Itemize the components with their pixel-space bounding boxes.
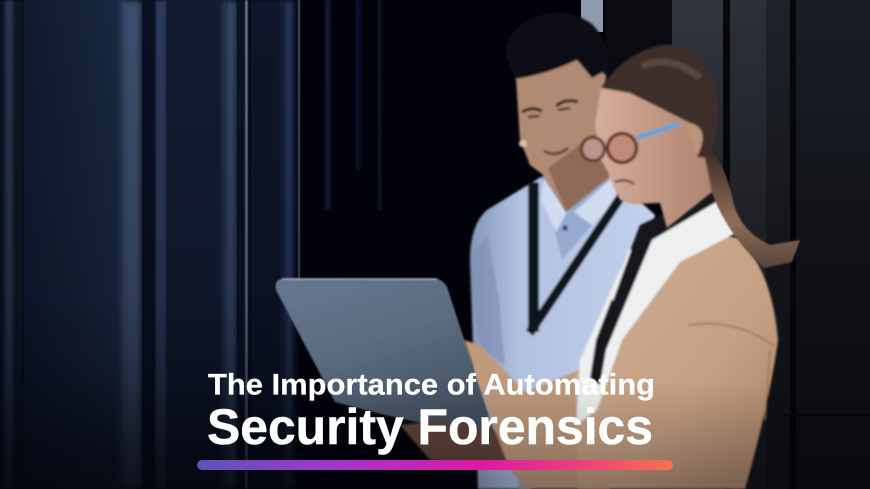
- background: server racks left: [0, 0, 382, 489]
- title line 1: The Importance of Automating: [208, 368, 655, 402]
- laptop: [276, 279, 497, 440]
- man: head and hair: [506, 12, 612, 212]
- woman: forearm and hand: [400, 340, 610, 489]
- bottom darkening: [0, 380, 870, 489]
- title line 2: Security Forensics: [207, 399, 653, 455]
- gradient underline bar: [197, 460, 673, 470]
- man: shirt and lanyard: [470, 170, 655, 489]
- background: dark cabinet panels right: [581, 0, 870, 489]
- woman: ponytail: [705, 150, 800, 268]
- woman: cardigan and collar: [575, 190, 778, 489]
- woman: head, hair and glasses: [582, 45, 718, 228]
